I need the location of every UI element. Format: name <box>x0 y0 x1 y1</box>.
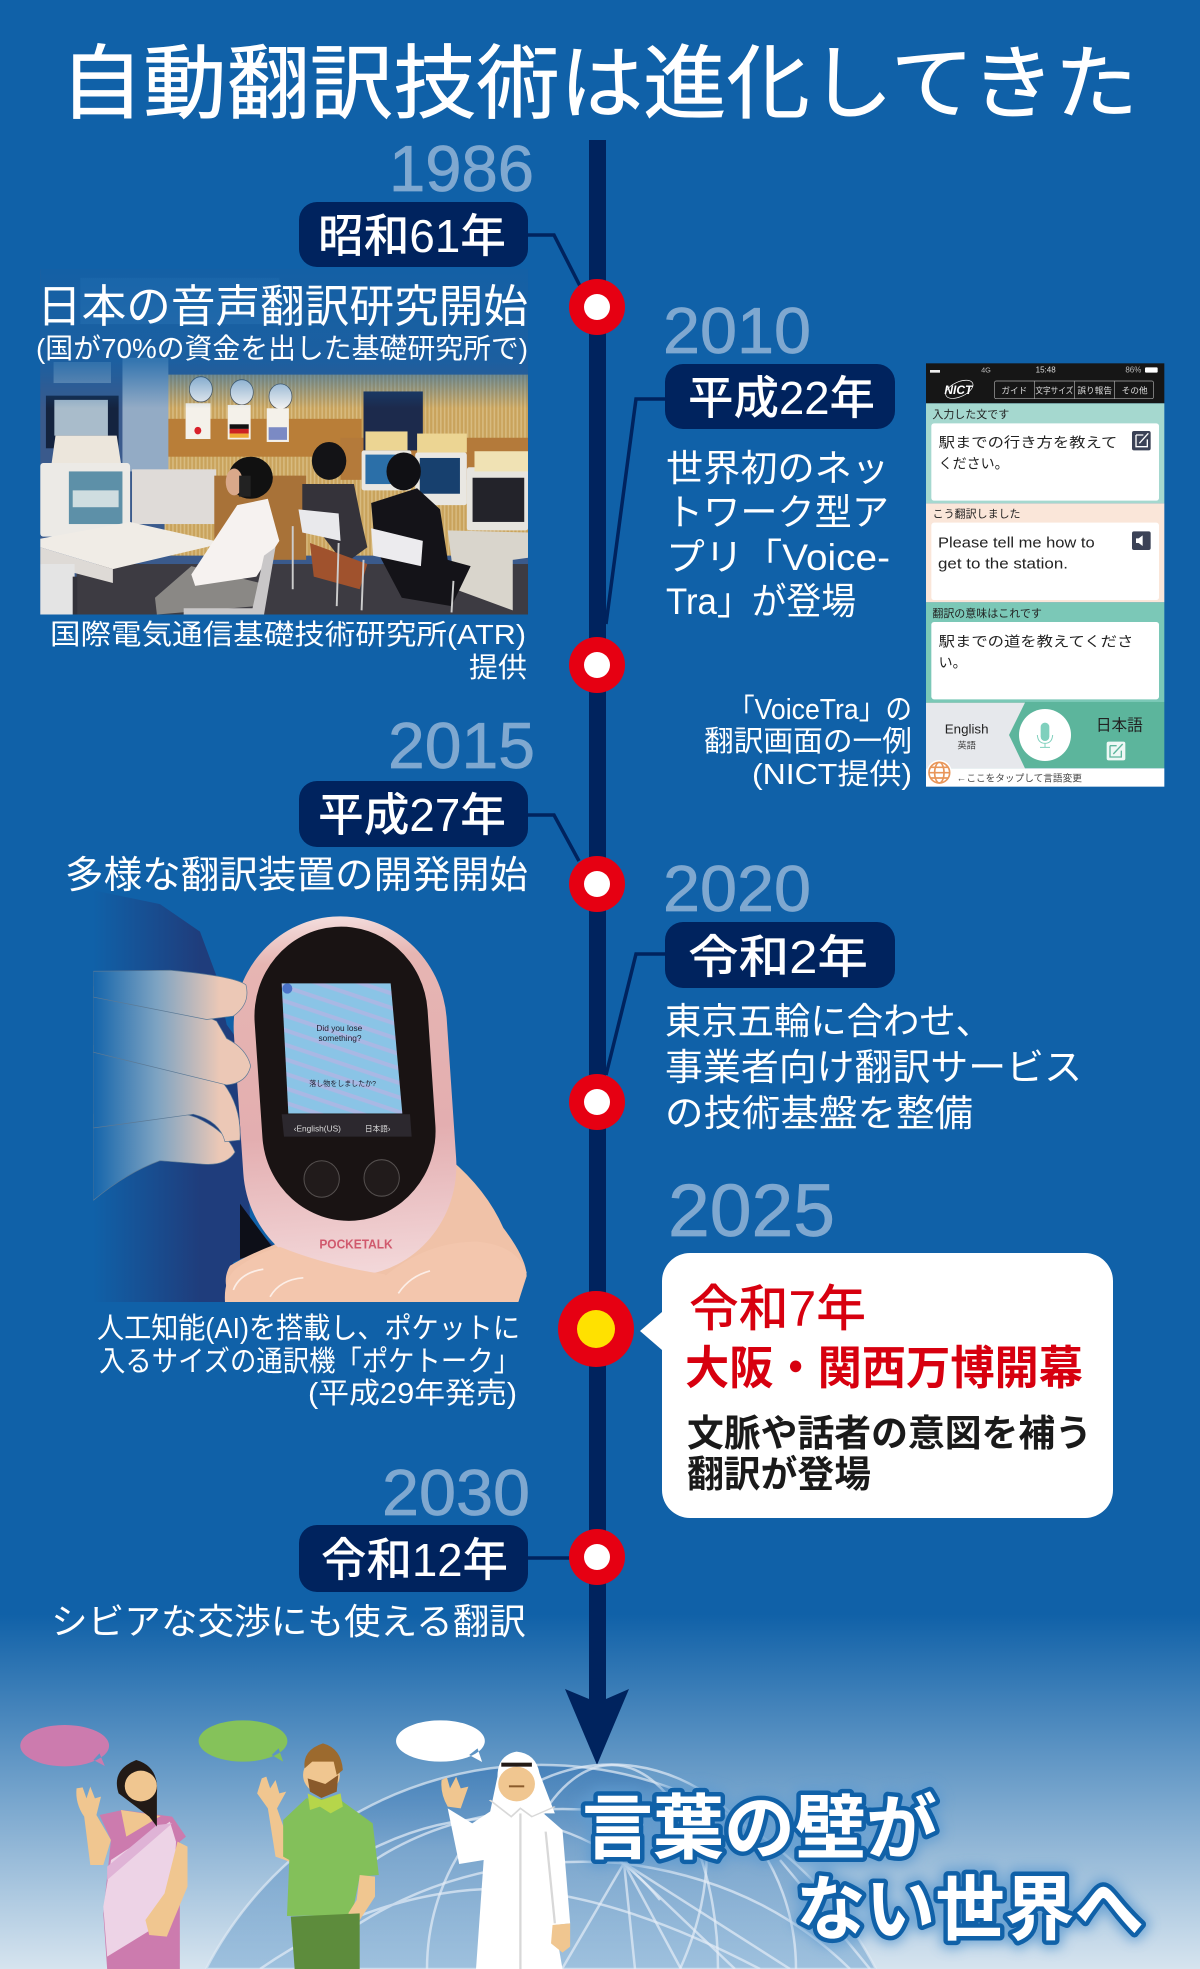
phone screenshot: VoiceTra: 駅までの道を教えてくださ <box>939 634 1133 650</box>
caption Pocketalk: 人工知能(AI)を搭載し、ポケットに <box>97 1312 520 1345</box>
phone screenshot: VoiceTra: い。 <box>939 655 967 671</box>
phone screenshot: VoiceTra: 日本語 <box>1096 717 1143 735</box>
subheading 1986: (国が70%の資金を出した基礎研究所で) <box>36 333 528 364</box>
closing message: 言葉の壁が <box>582 1790 937 1869</box>
people illustration with speech bubbles <box>20 1720 570 1969</box>
era pill 2010: 平成22年 <box>688 372 875 424</box>
era pill 2030 <box>299 1525 528 1592</box>
year 2025: 2025 <box>668 1169 835 1252</box>
description 2010: 世界初のネッ <box>666 448 889 489</box>
description 2010: プリ「Voice- <box>666 537 890 578</box>
phone screenshot: VoiceTra: NICT <box>944 383 974 397</box>
era pill 2020 <box>665 922 895 988</box>
era pill 1986: 昭和61年 <box>318 210 506 262</box>
year 2010: 2010 <box>663 294 811 367</box>
era pill 2010 <box>665 364 895 429</box>
phone screenshot: VoiceTra: 文字サイズ <box>1035 384 1074 395</box>
closing message: ない世界へ <box>796 1871 1144 1950</box>
person: woman in sari <box>76 1760 188 1969</box>
closing message: 言葉の壁が <box>582 1790 937 1869</box>
year 2020: 2020 <box>663 852 811 925</box>
era pill 2015 <box>299 781 528 847</box>
description 2025: 文脈や話者の意図を補う <box>687 1413 1092 1454</box>
phone screenshot: VoiceTra: ください。 <box>939 455 1009 471</box>
year 2015: 2015 <box>388 709 535 782</box>
caption Pocketalk <box>97 1312 520 1410</box>
era pill 2030: 令和12年 <box>321 1534 508 1586</box>
photo: Pocketalk held in hands: 落し物をしましたか? <box>309 1079 376 1088</box>
panel: 1986 <box>36 132 534 683</box>
photo: Pocketalk held in hands: Did you lose <box>316 1023 363 1033</box>
description 2010: トワーク型ア <box>666 492 889 533</box>
panel: 2015 <box>65 709 535 1410</box>
timeline bar with arrow <box>565 140 629 1765</box>
phone screenshot: VoiceTra: 翻訳の意味はこれです <box>932 606 1042 620</box>
callout box <box>640 1253 1113 1518</box>
photo credit 1986 <box>50 619 527 683</box>
description 2025: 翻訳が登場 <box>687 1454 871 1495</box>
phone screenshot: VoiceTra: 入力した文です <box>932 407 1009 421</box>
person: man in white thobe <box>441 1752 570 1969</box>
panel: 2025 callout <box>640 1169 1113 1518</box>
photo credit 1986: 国際電気通信基礎技術研究所(ATR) <box>50 619 526 650</box>
globe illustration <box>206 1765 876 1969</box>
era pill 2015: 平成27年 <box>318 789 506 841</box>
phone screenshot: VoiceTra: 15:48 <box>1036 366 1056 375</box>
description 2030: シビアな交渉にも使える翻訳 <box>51 1601 526 1642</box>
photo: Pocketalk held in hands: something? <box>318 1033 362 1043</box>
description 2010 <box>666 448 890 622</box>
closing message: ない世界へ <box>796 1871 1144 1950</box>
year 1986: 1986 <box>389 132 534 205</box>
description 2020: 東京五輪に合わせ、 <box>665 1001 992 1042</box>
caption VoiceTra <box>704 694 912 791</box>
speech bubble: white <box>396 1720 485 1762</box>
phone screenshot: VoiceTra: こう翻訳しました <box>933 507 1021 521</box>
caption Pocketalk: (平成29年発売) <box>308 1377 517 1410</box>
phone screenshot: VoiceTra: ガイド <box>1001 385 1027 395</box>
heading 1986: 日本の音声翻訳研究開始 <box>37 281 528 332</box>
phone screenshot: VoiceTra: 86% <box>1125 366 1141 375</box>
panel: 2020 <box>663 852 1082 1134</box>
milestone dots <box>558 279 634 1585</box>
photo credit 1986: 提供 <box>469 652 527 683</box>
heading 2025: 大阪・関西万博開幕 <box>685 1342 1083 1394</box>
phone screenshot: VoiceTra: ←ここをタップして言語変更 <box>957 772 1082 784</box>
phone screenshot: VoiceTra: 誤り報告 <box>1077 384 1112 395</box>
connector lines <box>528 235 665 1558</box>
phone screenshot: VoiceTra: 英語 <box>957 740 976 751</box>
photo: Pocketalk held in hands: ‹English(US) <box>294 1123 341 1133</box>
description 2020: 事業者向け翻訳サービス <box>665 1047 1082 1088</box>
photo: Pocketalk held in hands <box>93 890 527 1302</box>
person: bearded man in green shirt <box>257 1743 379 1969</box>
speech bubble: green <box>199 1720 287 1762</box>
title: 自動翻訳技術は進化してきた <box>60 40 1138 130</box>
photo: Pocketalk held in hands: POCKETALK <box>319 1236 393 1252</box>
year 2030: 2030 <box>382 1456 530 1529</box>
phone screenshot: VoiceTra: 駅までの行き方を教えて <box>939 434 1117 450</box>
description 2015: 多様な翻訳装置の開発開始 <box>65 855 528 897</box>
panel: 2010 <box>663 294 1164 791</box>
description 2020: の技術基盤を整備 <box>665 1093 973 1134</box>
panel: 2030 <box>51 1456 530 1642</box>
phone screenshot: VoiceTra <box>926 363 1164 787</box>
era pill 1986 <box>299 202 528 267</box>
speech bubble: pink <box>20 1725 109 1766</box>
phone screenshot: VoiceTra: 4G <box>981 366 991 375</box>
description 2025 <box>687 1413 1092 1495</box>
caption Pocketalk: 入るサイズの通訳機「ポケトーク」 <box>99 1345 520 1378</box>
caption VoiceTra: (NICT提供) <box>752 758 912 791</box>
caption VoiceTra: 「VoiceTra」の <box>728 694 912 726</box>
era text 2025: 令和7年 <box>689 1281 866 1337</box>
phone screenshot: VoiceTra: その他 <box>1122 384 1148 395</box>
photo: ATR research room <box>40 269 528 615</box>
caption VoiceTra: 翻訳画面の一例 <box>704 725 912 758</box>
closing message <box>582 1790 1144 1950</box>
description 2020 <box>665 1001 1082 1134</box>
phone screenshot: VoiceTra: Please tell me how to <box>938 536 1095 552</box>
phone screenshot: VoiceTra: English <box>945 722 989 737</box>
era pill 2020: 令和2年 <box>688 931 868 983</box>
phone screenshot: VoiceTra: get to the station. <box>938 557 1068 573</box>
photo: Pocketalk held in hands: 日本語› <box>365 1123 391 1133</box>
description 2010: Tra」が登場 <box>666 581 856 622</box>
